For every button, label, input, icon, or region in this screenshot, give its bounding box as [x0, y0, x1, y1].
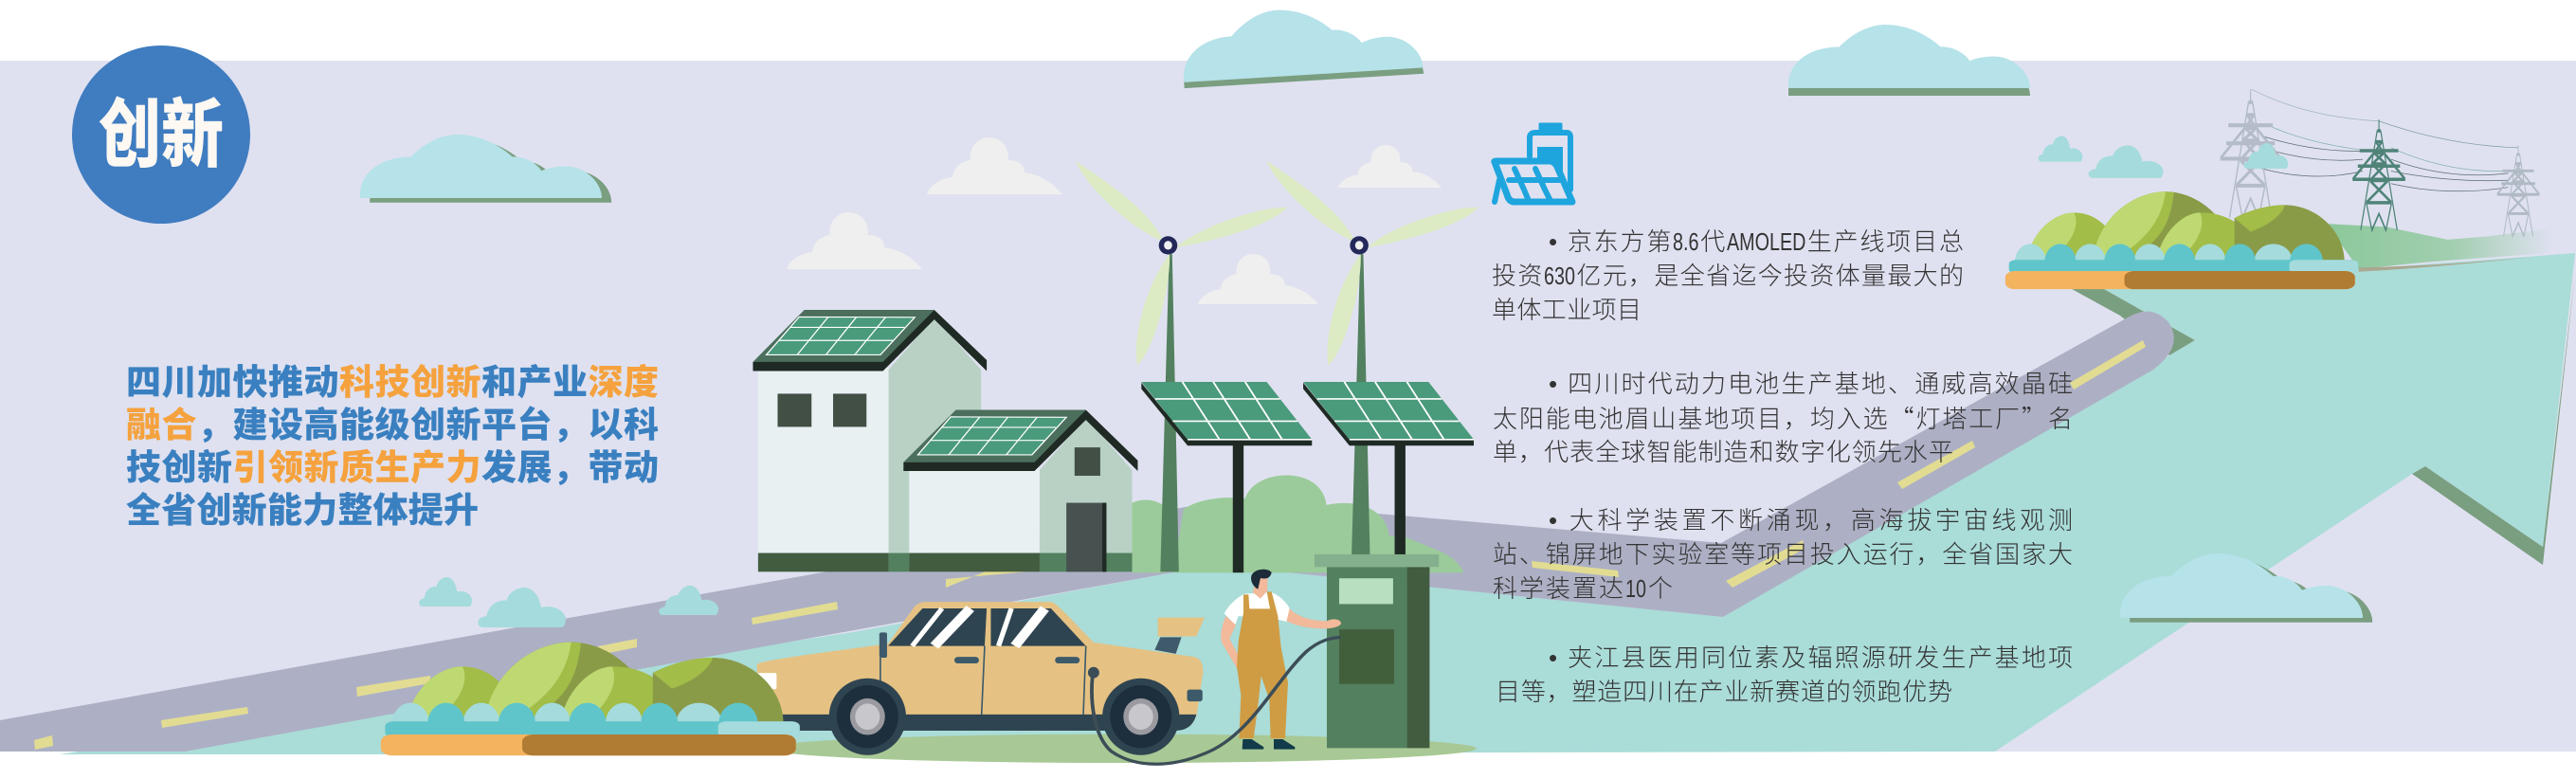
car	[757, 602, 1205, 755]
large cloud on arrow	[2120, 553, 2372, 623]
item 3: large science facilities: 大科学装置不断涌现，高海拔宇宙线观测	[1566, 506, 2073, 534]
item 1: BOE: 630	[1544, 262, 1575, 290]
small teal clouds right	[2039, 136, 2288, 178]
item 4: isotope base: 目等，塑造四川在产业新赛道的领跑优势	[1496, 678, 1952, 706]
lead line 2: 融合，建设高能级创新平台，以科	[126, 406, 659, 444]
teal rising arrow	[60, 253, 2575, 754]
tall house	[753, 310, 987, 571]
item 1: BOE: 单体工业项目	[1492, 296, 1642, 324]
turbine left	[1076, 161, 1287, 571]
item 4: isotope base: •	[1549, 643, 1557, 672]
icon: battery and solar panel	[1495, 124, 1572, 202]
worker	[1221, 570, 1341, 750]
lead statement	[126, 363, 659, 530]
badge title: 创新	[99, 93, 224, 176]
item 1: BOE	[1492, 227, 1964, 324]
pylon left	[2221, 89, 2281, 218]
charging cable	[1088, 637, 1341, 764]
lead line 4: 全省创新能力整体提升	[126, 491, 479, 530]
item 2: lighthouse factories: 太阳能电池眉山基地项目，均入选“灯塔工厂”名	[1493, 400, 2073, 435]
planter bars	[381, 721, 800, 755]
item 3: large science facilities: 站、锦屏地下实验室等项目投入运行，全省国家大	[1493, 540, 2073, 569]
ground ellipse	[768, 734, 1477, 763]
shoreline strip	[2359, 256, 2540, 272]
item 2: lighthouse factories: 四川时代动力电池生产基地、通威高效晶硅	[1566, 370, 2073, 398]
green hills behind houses	[1133, 476, 1463, 572]
item 3: large science facilities	[1493, 506, 2073, 603]
item 1: BOE: 京东方第 代 生产线项目总	[1566, 227, 1964, 256]
arrow shadow	[2072, 273, 2575, 565]
item 2: lighthouse factories: •	[1549, 370, 1557, 398]
small house	[903, 409, 1137, 571]
item 3: large science facilities: 10	[1625, 574, 1646, 603]
road	[0, 312, 2174, 752]
item 3: large science facilities: •	[1549, 506, 1557, 534]
planter left with bushes	[381, 643, 800, 755]
lead line 3: 技创新引领新质生产力发展，带动	[126, 448, 659, 487]
pylon right	[2497, 145, 2539, 236]
power lines and pylons	[2039, 89, 2552, 272]
lead line 1: 四川加快推动科技创新和产业深度	[126, 363, 659, 402]
item 4: isotope base	[1496, 643, 2073, 706]
item 1: BOE: AMOLED	[1727, 227, 1806, 256]
pylon middle	[2352, 119, 2405, 230]
bubble hedge	[392, 703, 758, 744]
planter bars	[2005, 260, 2358, 289]
wheels	[829, 679, 1179, 755]
road lane markings	[34, 340, 2146, 750]
open trunk	[1158, 618, 1205, 636]
turbine right	[1267, 161, 1478, 557]
planter right with bushes	[2005, 191, 2358, 289]
large sky cloud top right	[1788, 25, 2030, 96]
item 1: BOE: 8.6	[1673, 227, 1699, 256]
solar array left	[1141, 382, 1312, 572]
small teal clouds left	[419, 577, 718, 627]
item 3: large science facilities: 科学装置达 个	[1493, 574, 1673, 603]
bubble hedge	[2015, 244, 2323, 280]
item 4: isotope base: 夹江县医用同位素及辐照源研发生产基地项	[1566, 643, 2073, 672]
badge: innovation	[72, 45, 250, 224]
wires	[2252, 89, 2518, 191]
item 2: lighthouse factories	[1493, 370, 2073, 466]
large sky cloud top centre	[1180, 2, 1424, 88]
charging station	[1315, 554, 1439, 748]
item 1: BOE: 投资 亿元，是全省迄今投资体量最大的	[1492, 262, 1964, 290]
distant green ground	[2327, 224, 2552, 269]
solar array right	[1303, 382, 1474, 555]
wind turbines	[753, 161, 1478, 763]
item 2: lighthouse factories: 单，代表全球智能制造和数字化领先水平	[1493, 438, 1953, 466]
item 1: BOE: •	[1549, 227, 1557, 256]
large sky cloud left	[360, 135, 611, 203]
pale background clouds	[787, 137, 1442, 304]
